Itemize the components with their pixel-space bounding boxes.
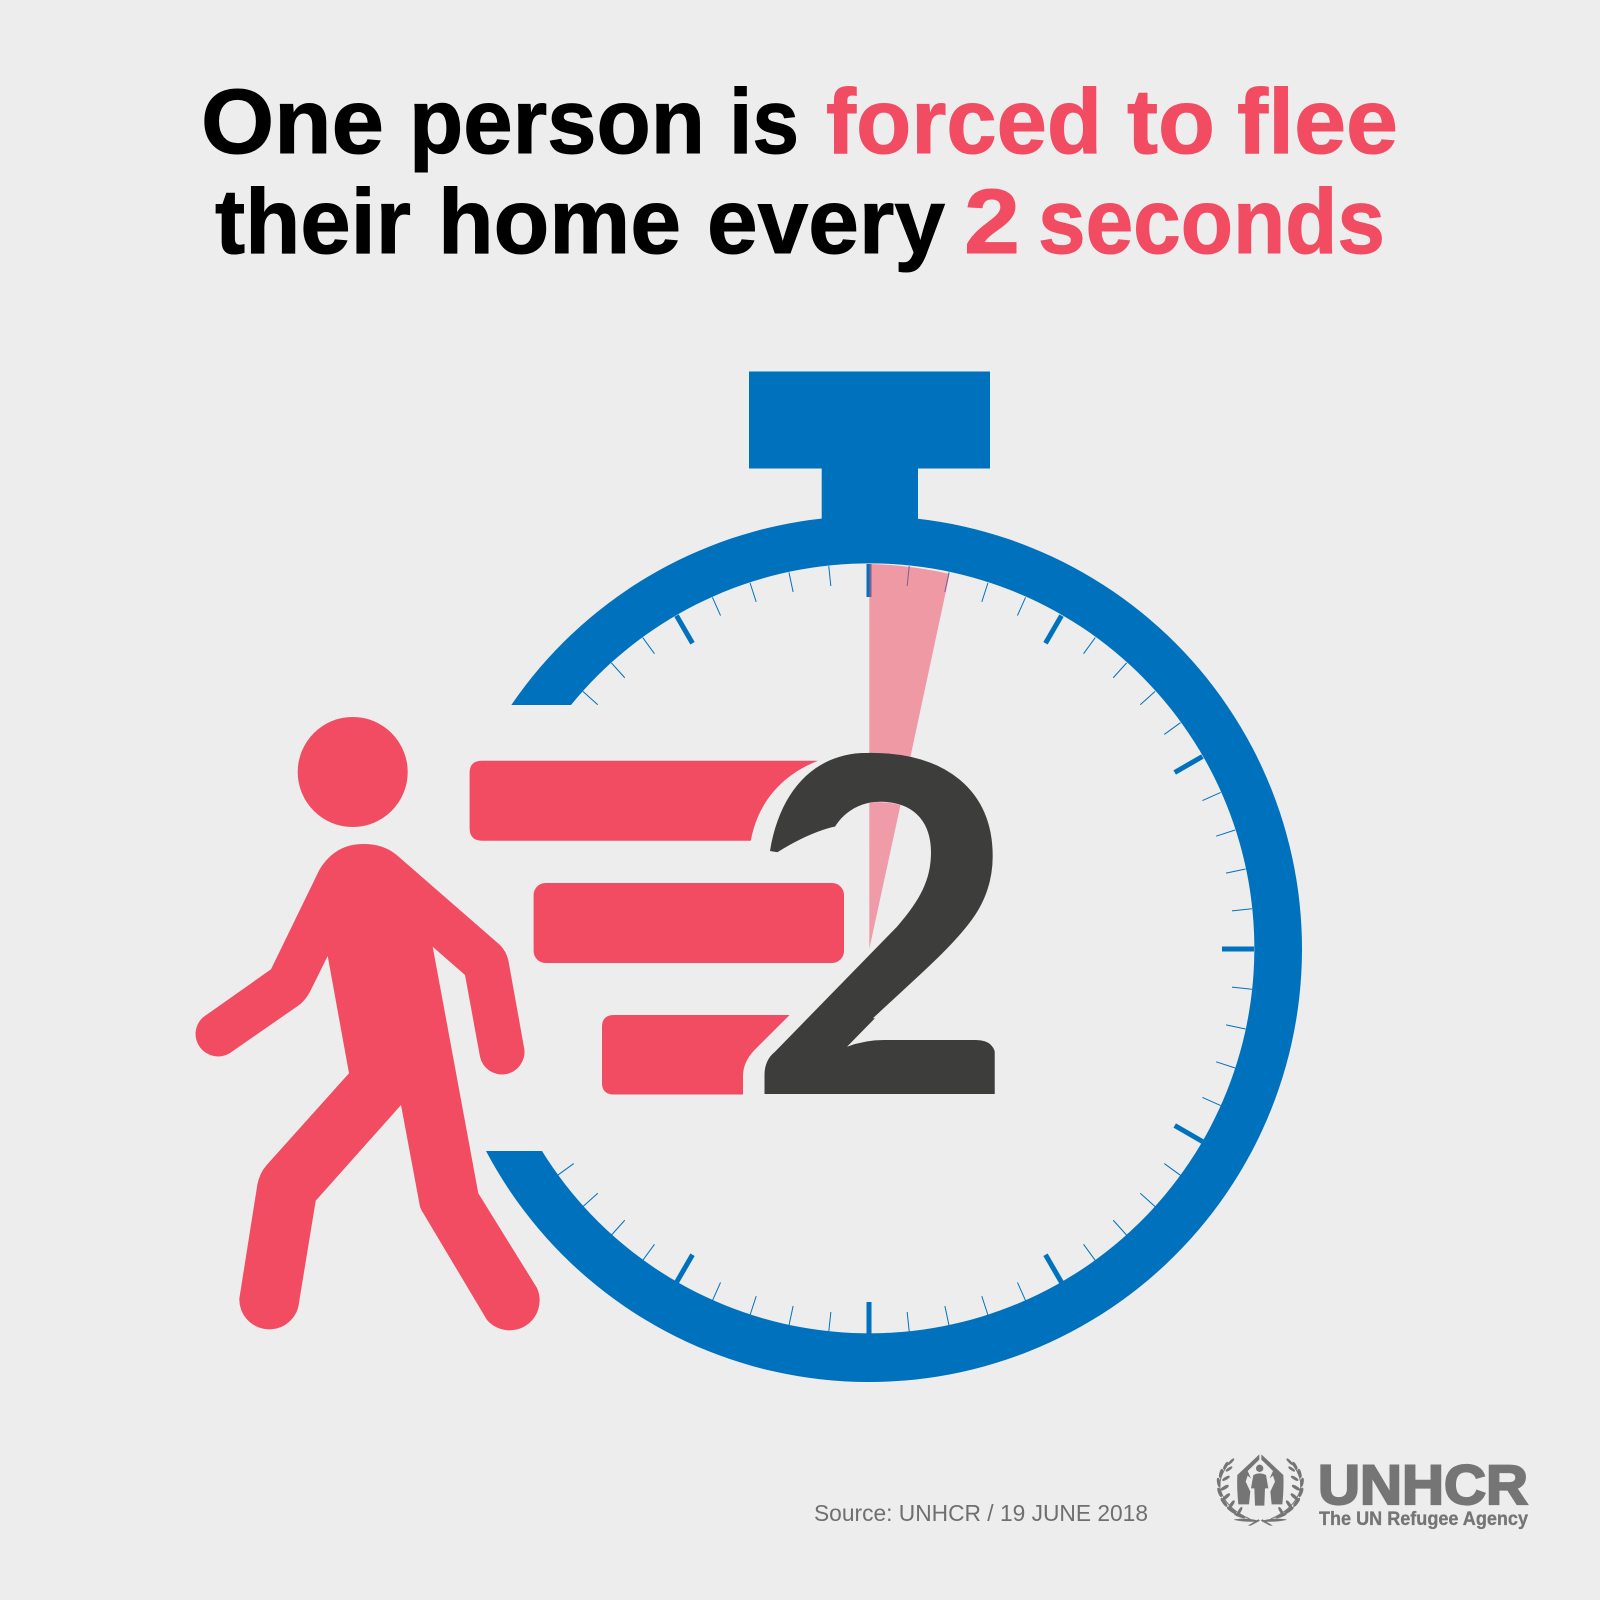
emblem right laurel xyxy=(1261,1458,1304,1525)
title line 1 highlight xyxy=(826,71,1398,173)
emblem right hand xyxy=(1261,1454,1284,1504)
logo tagline: The UN Refugee Agency xyxy=(1319,1509,1528,1530)
title line 2 black: their xyxy=(215,171,411,273)
big number 2: 2 xyxy=(734,679,1024,1190)
person head xyxy=(298,717,408,827)
running person icon xyxy=(196,717,540,1330)
wedge seen through the numeral xyxy=(869,802,900,949)
speed bar bottom xyxy=(602,1015,790,1094)
stopwatch ring xyxy=(486,516,1302,1382)
title line 2 black: every xyxy=(707,171,945,273)
title line 1 black: One xyxy=(201,71,384,173)
emblem figure head xyxy=(1256,1465,1263,1472)
title line 1 highlight: flee xyxy=(1237,71,1398,173)
title xyxy=(201,71,1398,273)
logo wordmark: UNHCR xyxy=(1318,1453,1528,1516)
speed bars xyxy=(470,761,844,1094)
title line 1 black xyxy=(201,71,799,173)
title line 2 black: home xyxy=(438,171,681,273)
UNHCR logo xyxy=(1217,1453,1528,1530)
minor tick marks xyxy=(558,566,1252,1332)
logo emblem xyxy=(1217,1454,1304,1525)
title line 1 black: is xyxy=(729,71,799,173)
stopwatch xyxy=(486,372,1302,1382)
source text: Source: UNHCR / 19 JUNE 2018 xyxy=(814,1500,1148,1526)
emblem figure xyxy=(1251,1473,1268,1506)
two-second wedge xyxy=(869,564,950,949)
title line 1 highlight: forced xyxy=(826,71,1102,173)
stopwatch stem xyxy=(822,460,918,530)
person body xyxy=(196,844,540,1330)
title line 1 black: person xyxy=(409,71,705,173)
emblem left hand xyxy=(1237,1454,1259,1504)
title line 2 highlight: seconds xyxy=(1038,171,1385,273)
title line 1 highlight: to xyxy=(1127,71,1215,173)
title line 2 black xyxy=(215,171,945,273)
title line 2 highlight: 2 xyxy=(964,171,1020,273)
stopwatch crown button xyxy=(749,372,990,468)
speed bar top xyxy=(470,761,818,841)
major tick marks xyxy=(676,564,1254,1334)
speed bar middle xyxy=(534,883,844,963)
emblem left laurel xyxy=(1217,1458,1259,1525)
